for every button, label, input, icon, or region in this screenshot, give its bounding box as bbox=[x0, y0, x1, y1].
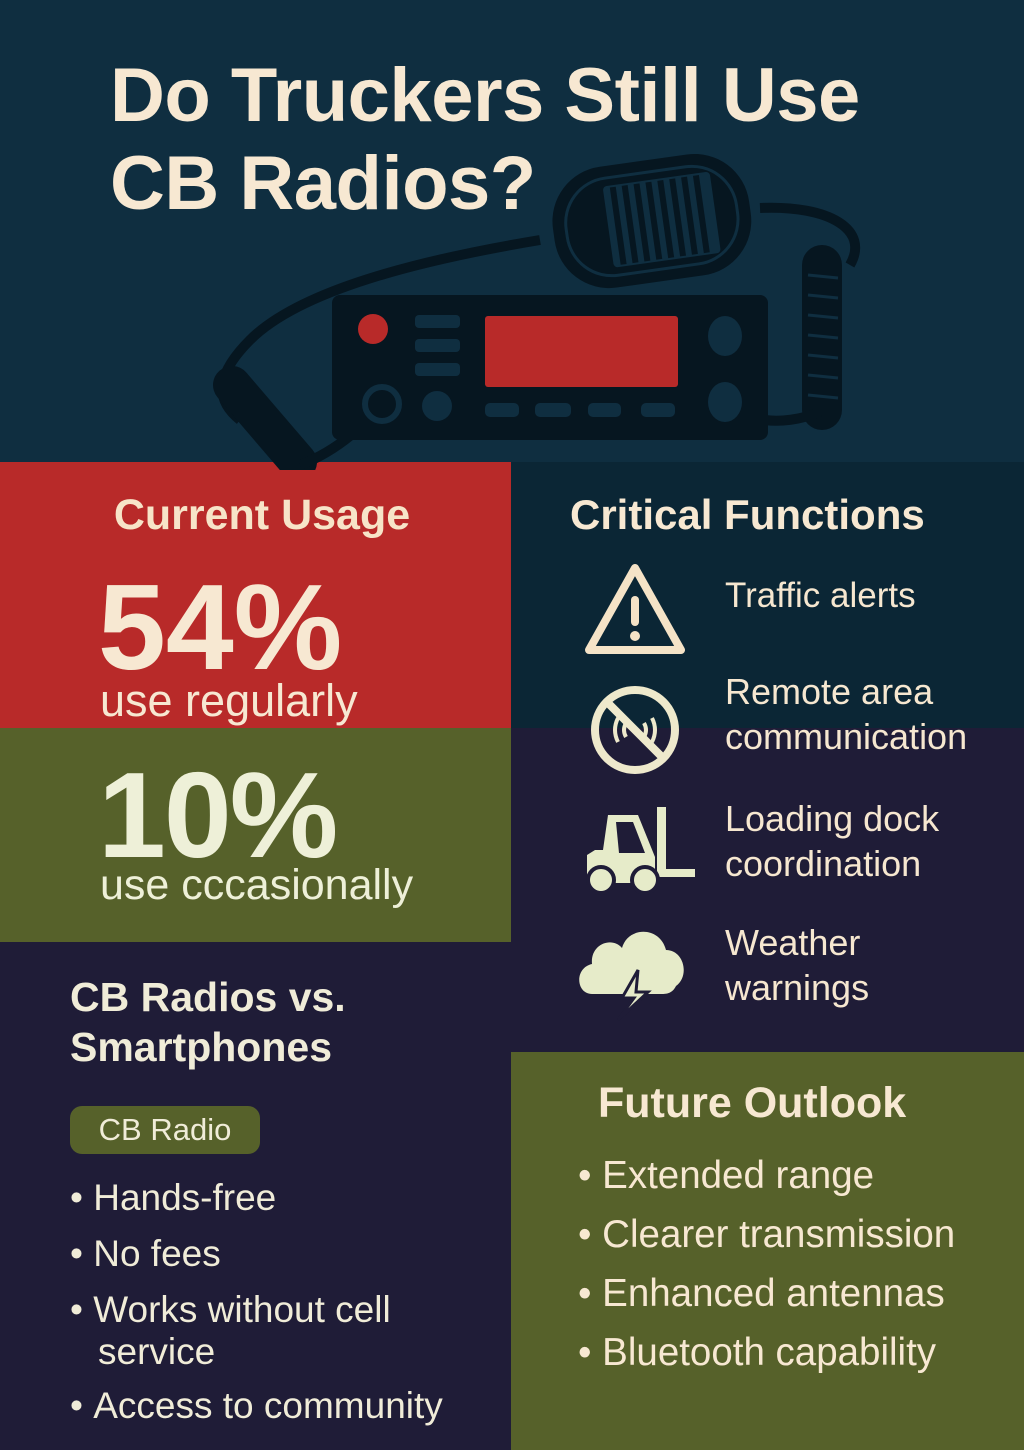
icon: no signal bbox=[591, 686, 679, 774]
heading: critical functions: Critical Functions bbox=[570, 491, 925, 538]
panel: critical functions top bbox=[511, 462, 1024, 728]
panel: current usage red bbox=[0, 462, 511, 728]
list: future outlook bbox=[578, 1154, 955, 1374]
stat: 10%: 10% bbox=[98, 747, 336, 883]
text: remote area communication bbox=[725, 671, 967, 757]
tag: cb radio: CB Radio bbox=[99, 1112, 231, 1147]
text: traffic alerts: Traffic alerts bbox=[725, 576, 916, 615]
list: cb radio benefits: • Works without cell bbox=[70, 1289, 391, 1330]
icon: forklift bbox=[587, 807, 695, 891]
title bbox=[110, 53, 860, 226]
heading: cb radios vs smartphones: Smartphones bbox=[70, 1024, 332, 1070]
body bbox=[332, 295, 768, 440]
text: loading dock coordination: Loading dock bbox=[725, 798, 939, 839]
panel: occasional olive bbox=[0, 728, 511, 942]
text: remote area communication: communication bbox=[725, 716, 967, 757]
text: loading dock coordination bbox=[725, 798, 940, 884]
heading: cb radios vs smartphones: CB Radios vs. bbox=[70, 974, 346, 1020]
left cable bbox=[222, 240, 540, 420]
text: remote area communication: Remote area bbox=[725, 671, 933, 712]
list: future outlook: • Bluetooth capability bbox=[578, 1331, 936, 1374]
text: weather warnings: warnings bbox=[725, 967, 869, 1008]
mic bbox=[545, 147, 758, 295]
text: weather warnings: Weather bbox=[725, 922, 860, 963]
text: loading dock coordination: coordination bbox=[725, 843, 921, 884]
radio illustration bbox=[213, 154, 860, 470]
text: weather warnings bbox=[725, 922, 869, 1008]
stat: 54%: 54% bbox=[98, 559, 342, 695]
list: cb radio benefits: • No fees bbox=[70, 1233, 221, 1274]
list: cb radio benefits bbox=[70, 1177, 443, 1426]
heading: current usage: Current Usage bbox=[114, 491, 410, 539]
heading: cb radios vs smartphones bbox=[70, 974, 346, 1070]
list: future outlook: • Clearer transmission bbox=[578, 1213, 955, 1256]
title: CB Radios? bbox=[110, 141, 536, 226]
label: use occasionally: use cccasionally bbox=[100, 861, 413, 909]
list: cb radio benefits: • Hands-free bbox=[70, 1177, 276, 1218]
title: Do Truckers Still Use bbox=[110, 53, 860, 138]
icon: storm cloud bbox=[579, 932, 684, 1008]
icon: warning bbox=[585, 564, 685, 654]
list: future outlook: • Extended range bbox=[578, 1154, 874, 1197]
list: future outlook: • Enhanced antennas bbox=[578, 1272, 945, 1315]
heading: future outlook: Future Outlook bbox=[598, 1079, 906, 1127]
header background bbox=[0, 0, 1024, 462]
right cable bbox=[760, 208, 855, 265]
label: use regularly: use regularly bbox=[100, 675, 358, 726]
list: cb radio benefits: • Access to community bbox=[70, 1385, 443, 1426]
tag: cb radio bbox=[70, 1106, 260, 1154]
panel: future outlook bbox=[511, 1052, 1024, 1450]
list: cb radio benefits: service bbox=[98, 1331, 215, 1372]
